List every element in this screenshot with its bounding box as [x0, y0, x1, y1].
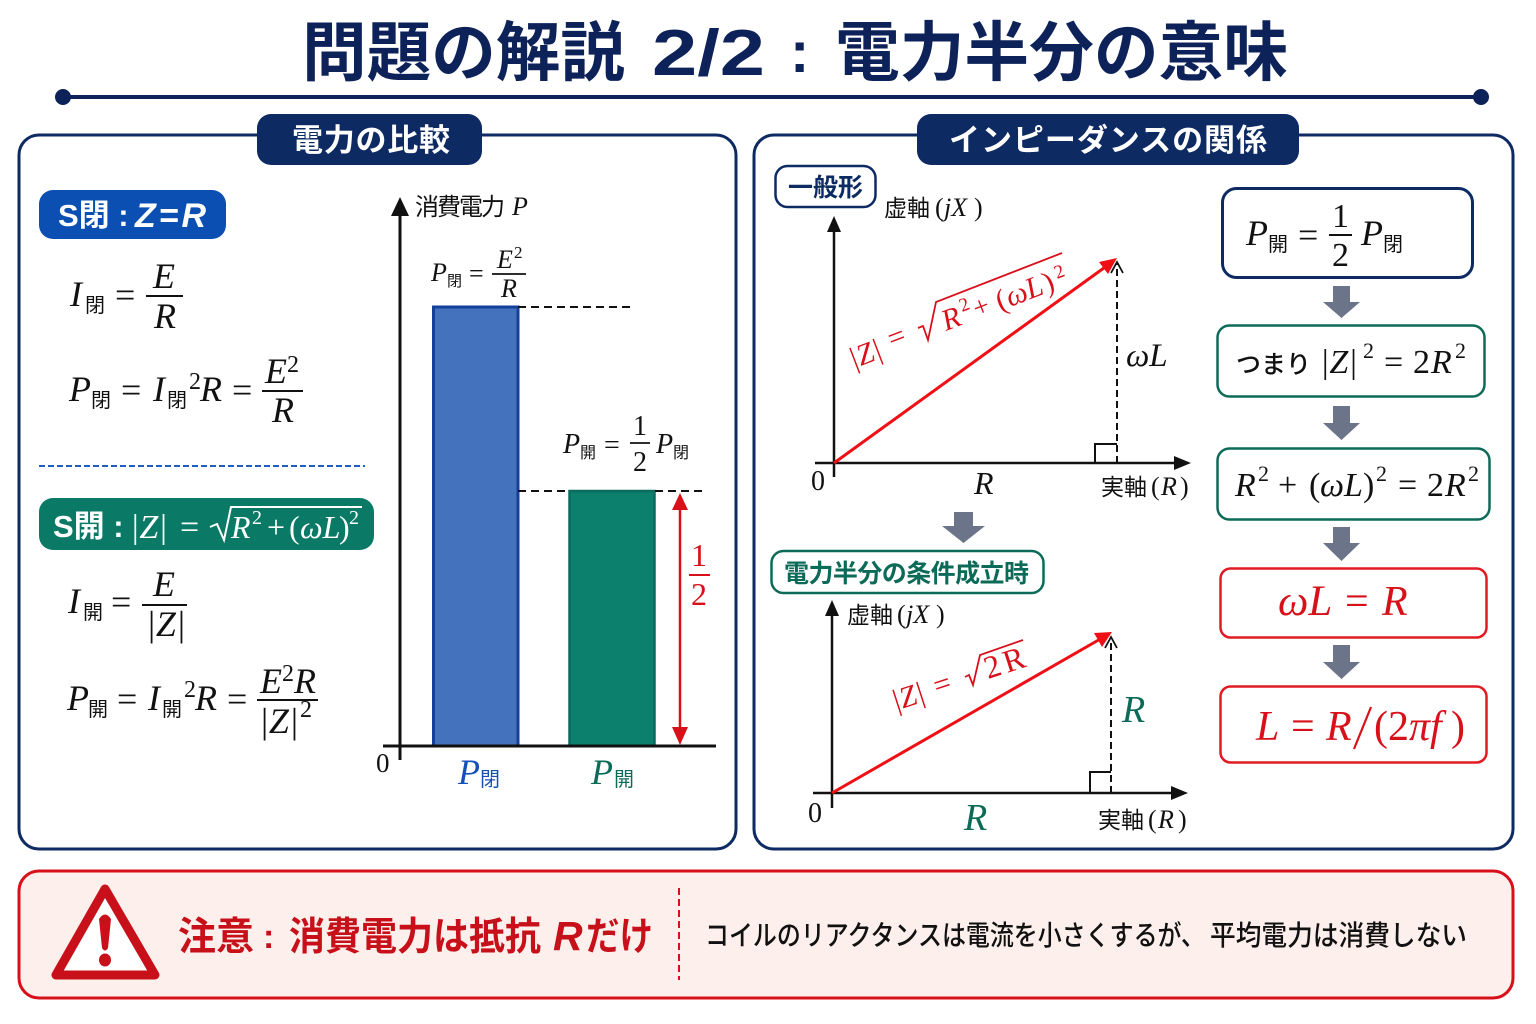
- caution heading: 消費電力は抵抗: [289, 916, 541, 959]
- phasor diagram: general: ): [1038, 265, 1059, 300]
- chip: S open: =: [180, 509, 199, 546]
- caution heading: 注意: [178, 916, 254, 959]
- caution text: 平均電力は消費しない: [1210, 920, 1467, 951]
- formula: closed power: 2: [287, 352, 299, 378]
- box: expanded equation: +: [1278, 467, 1297, 504]
- chip: S open: (: [289, 509, 300, 545]
- heading: impedance relation: [917, 114, 1299, 165]
- phasor diagram: condition: |Z|: [887, 676, 929, 718]
- formula: closed power: 閉: [91, 390, 111, 412]
- box: impedance squared: 2: [1455, 338, 1466, 363]
- chip: S open: |Z|: [130, 509, 168, 546]
- label: closed bar: 閉: [480, 769, 500, 791]
- box: half power equation: P: [1360, 213, 1383, 253]
- formula: open power: 開: [88, 699, 108, 721]
- label: closed power formula: =: [469, 259, 484, 288]
- box: half power equation: 2: [1332, 237, 1349, 274]
- formula: open power: |Z|: [259, 701, 299, 741]
- icon: warning triangle: [56, 889, 155, 975]
- phasor diagram: condition: 0: [808, 798, 822, 829]
- formula: open power: =: [117, 679, 137, 719]
- phasor diagram: general: R: [973, 465, 994, 501]
- box: expanded equation: R: [1444, 467, 1466, 504]
- box: result omega L: ωL: [1278, 578, 1332, 625]
- phasor diagram: general: 0: [811, 466, 825, 497]
- label: half power formula: 1: [633, 411, 647, 442]
- heading: impedance relation: インピーダンスの関係: [949, 123, 1267, 158]
- chip: half-power condition: 電力半分の条件成立時: [784, 560, 1029, 588]
- box: expanded equation: ωL: [1320, 467, 1363, 504]
- formula: open current: I: [67, 581, 82, 621]
- label: half power formula: =: [604, 430, 620, 461]
- formula: open power: [66, 661, 318, 741]
- label: closed bar: P: [457, 752, 480, 792]
- phasor diagram: condition: 2: [979, 646, 1005, 686]
- box: half power equation: =: [1298, 215, 1318, 255]
- formula: open power: R: [194, 678, 217, 718]
- chip: S open: [39, 498, 374, 550]
- formula: open current: |Z|: [146, 604, 186, 644]
- phasor diagram: general: 2: [956, 294, 973, 317]
- box: half power equation: 開: [1268, 234, 1288, 256]
- box: impedance squared: 2: [1363, 338, 1374, 363]
- label: one half: 1: [691, 537, 707, 573]
- box: impedance squared: R: [1430, 344, 1452, 381]
- chip: general form: 一般形: [788, 174, 863, 202]
- phasor diagram: condition: jX: [903, 600, 930, 629]
- phasor diagram: general: R: [936, 300, 966, 338]
- panel: power comparison: [19, 114, 736, 849]
- phasor diagram: condition: ): [1178, 805, 1187, 834]
- label: half power formula: [562, 411, 689, 478]
- title: :: [790, 20, 809, 85]
- formula: closed power: R: [271, 390, 294, 430]
- phasor diagram: condition: (: [897, 600, 906, 629]
- chip: half-power condition: [772, 551, 1044, 593]
- formula: closed current: 閉: [85, 295, 105, 317]
- formula: closed power: =: [232, 370, 252, 410]
- box: result L: =: [1291, 704, 1315, 750]
- label: closed power formula: 閉: [447, 273, 462, 290]
- formula: open power: 開: [162, 699, 182, 721]
- arrow: down to condition: [942, 512, 985, 543]
- caution heading: :: [263, 918, 274, 956]
- box: result L: R: [1325, 704, 1352, 750]
- box: result omega L: R: [1381, 579, 1408, 625]
- phasor diagram: general: ωL: [1001, 269, 1048, 314]
- formula: open current: =: [111, 582, 131, 622]
- label: closed power formula: 2: [514, 243, 522, 262]
- label: one half: 2: [691, 576, 707, 612]
- arrow: half marker: [672, 493, 688, 745]
- box: half power equation: 1: [1332, 198, 1349, 235]
- heading: power comparison: 電力の比較: [292, 123, 450, 158]
- chip: S open: +: [267, 509, 285, 545]
- phasor diagram: condition: [808, 600, 1188, 839]
- label: one half: [689, 537, 710, 612]
- chip: S open: 2: [349, 507, 359, 529]
- phasor diagram: condition: 虚軸: [847, 602, 893, 628]
- box: expanded equation: R: [1234, 467, 1256, 504]
- heading: power comparison: [257, 114, 482, 165]
- formula: open power: I: [147, 678, 162, 718]
- panel: caution: [19, 871, 1513, 998]
- phasor diagram: general: 2: [1051, 261, 1068, 284]
- formula: closed power: [68, 351, 303, 430]
- box: impedance squared: つまり: [1236, 351, 1311, 379]
- bar chart: power: [376, 192, 716, 792]
- phasor diagram: general: (: [1151, 472, 1160, 501]
- formula: open power: 2: [184, 677, 196, 703]
- label: half power formula: 開: [580, 445, 596, 462]
- formula: closed current: [69, 256, 183, 336]
- phasor diagram: condition: (: [1148, 805, 1157, 834]
- label: closed bar: [457, 752, 500, 792]
- box: result omega L: [1220, 568, 1486, 638]
- box: expanded equation: =: [1398, 467, 1417, 504]
- phasor diagram: general: [811, 193, 1191, 501]
- chip: S open: 2: [252, 507, 262, 529]
- formula: closed power: 閉: [167, 390, 187, 412]
- formula: closed current: =: [115, 275, 135, 315]
- arrow: [1323, 406, 1360, 440]
- box: half power equation: 閉: [1383, 234, 1403, 256]
- y axis: P: [511, 192, 528, 221]
- phasor diagram: condition: =: [929, 666, 955, 703]
- title: 問題の解説: [302, 16, 625, 89]
- chip: S open: ): [339, 509, 350, 545]
- caution text: コイルのリアクタンスは電流を小さくするが、: [705, 920, 1205, 951]
- caution heading: R: [553, 913, 583, 959]
- phasor diagram: general: (: [991, 283, 1012, 318]
- label: half power formula: 閉: [673, 445, 689, 462]
- label: open bar: P: [590, 752, 613, 792]
- bar: closed: [434, 307, 518, 746]
- phasor diagram: condition: R: [963, 797, 987, 839]
- chip: S open: S開 :: [53, 509, 124, 544]
- axis origin: 0: [376, 748, 390, 778]
- formula: closed power: I: [152, 369, 167, 409]
- formula: open current: 開: [83, 602, 103, 624]
- arrow: [1323, 527, 1360, 561]
- box: result omega L: =: [1345, 579, 1369, 625]
- chip: S closed: S閉 :: [58, 198, 129, 233]
- label: half power formula: P: [655, 429, 673, 460]
- formula: open power: =: [227, 679, 247, 719]
- chip: general form: [776, 166, 876, 207]
- title: 電力半分の意味: [835, 16, 1288, 89]
- label: open bar: 開: [614, 769, 634, 791]
- arrow: [1323, 645, 1360, 679]
- formula: open power: 2: [282, 661, 294, 687]
- bar: open: [570, 491, 654, 746]
- phasor diagram: general: R: [1160, 472, 1177, 501]
- formula: open current: [67, 564, 187, 644]
- formula: open power: E: [259, 661, 282, 701]
- box: impedance squared: [1218, 326, 1484, 396]
- box: result L: πf: [1409, 704, 1447, 750]
- phasor diagram: general: jX: [941, 193, 968, 222]
- phasor diagram: general: =: [883, 319, 910, 356]
- label: closed power formula: [430, 243, 526, 303]
- box: impedance squared: 2: [1413, 344, 1430, 381]
- label: half power formula: P: [562, 429, 580, 460]
- chip: S closed: Z=R: [134, 197, 206, 235]
- arrow: [1323, 286, 1360, 318]
- box: impedance squared: |Z|: [1320, 344, 1358, 381]
- formula: closed current: R: [153, 296, 176, 336]
- formula: open current: E: [152, 564, 175, 604]
- phasor diagram: condition: R: [998, 639, 1030, 680]
- formula: open power: P: [66, 678, 89, 718]
- box: expanded equation: ): [1363, 467, 1374, 504]
- label: half power formula: 2: [633, 447, 647, 478]
- box: expanded equation: 2: [1376, 461, 1387, 486]
- phasor diagram: condition: ): [936, 600, 945, 629]
- box: result L: L: [1255, 704, 1279, 750]
- phasor diagram: general: (: [935, 193, 944, 222]
- box: expanded equation: 2: [1258, 461, 1269, 486]
- title: 2/2: [652, 16, 765, 89]
- box: expanded equation: 2: [1468, 461, 1479, 486]
- panel: impedance relation: [754, 114, 1513, 849]
- phasor diagram: condition: R: [1157, 805, 1174, 834]
- phasor diagram: general: ): [974, 193, 983, 222]
- phasor diagram: general: ): [1180, 472, 1189, 501]
- caution heading: だけ: [586, 916, 653, 959]
- phasor diagram: general: |Z|: [844, 333, 886, 376]
- phasor diagram: general: 虚軸: [884, 195, 930, 221]
- box: result L: ): [1451, 704, 1465, 750]
- formula: closed current: I: [69, 274, 84, 314]
- box: impedance squared: =: [1384, 344, 1403, 381]
- label: closed power formula: E: [496, 245, 513, 274]
- phasor diagram: condition: R: [1121, 689, 1145, 731]
- box: half power equation: [1222, 188, 1472, 278]
- phasor diagram: general: ωL: [1126, 338, 1168, 374]
- phasor diagram: general: +: [968, 290, 994, 325]
- label: closed power formula: R: [500, 274, 517, 303]
- formula: closed power: R: [199, 369, 222, 409]
- formula: closed power: E: [264, 351, 287, 391]
- formula: open power: 2: [300, 697, 312, 723]
- box: result L: [1220, 686, 1486, 762]
- title: [55, 16, 1489, 105]
- y axis: 消費電力: [415, 194, 505, 221]
- formula: open power: R: [293, 661, 316, 701]
- chip: S closed: [39, 190, 226, 239]
- formula: closed current: E: [152, 256, 175, 296]
- chip: S open: ωL: [300, 509, 340, 545]
- box: half power equation: P: [1245, 213, 1268, 253]
- box: expanded equation: [1218, 448, 1490, 520]
- formula: closed power: 2: [189, 369, 201, 395]
- label: closed power formula: P: [430, 258, 447, 287]
- formula: closed power: =: [121, 370, 141, 410]
- chip: S open: R: [230, 509, 251, 545]
- box: expanded equation: (: [1309, 467, 1320, 504]
- label: open bar: [590, 752, 634, 792]
- box: result L: (2: [1374, 704, 1409, 750]
- box: expanded equation: 2: [1427, 467, 1444, 504]
- phasor diagram: condition: 実軸: [1098, 807, 1144, 833]
- formula: closed power: P: [68, 369, 91, 409]
- phasor diagram: general: 実軸: [1101, 474, 1147, 500]
- caution heading: [178, 913, 653, 959]
- y axis: [391, 192, 528, 760]
